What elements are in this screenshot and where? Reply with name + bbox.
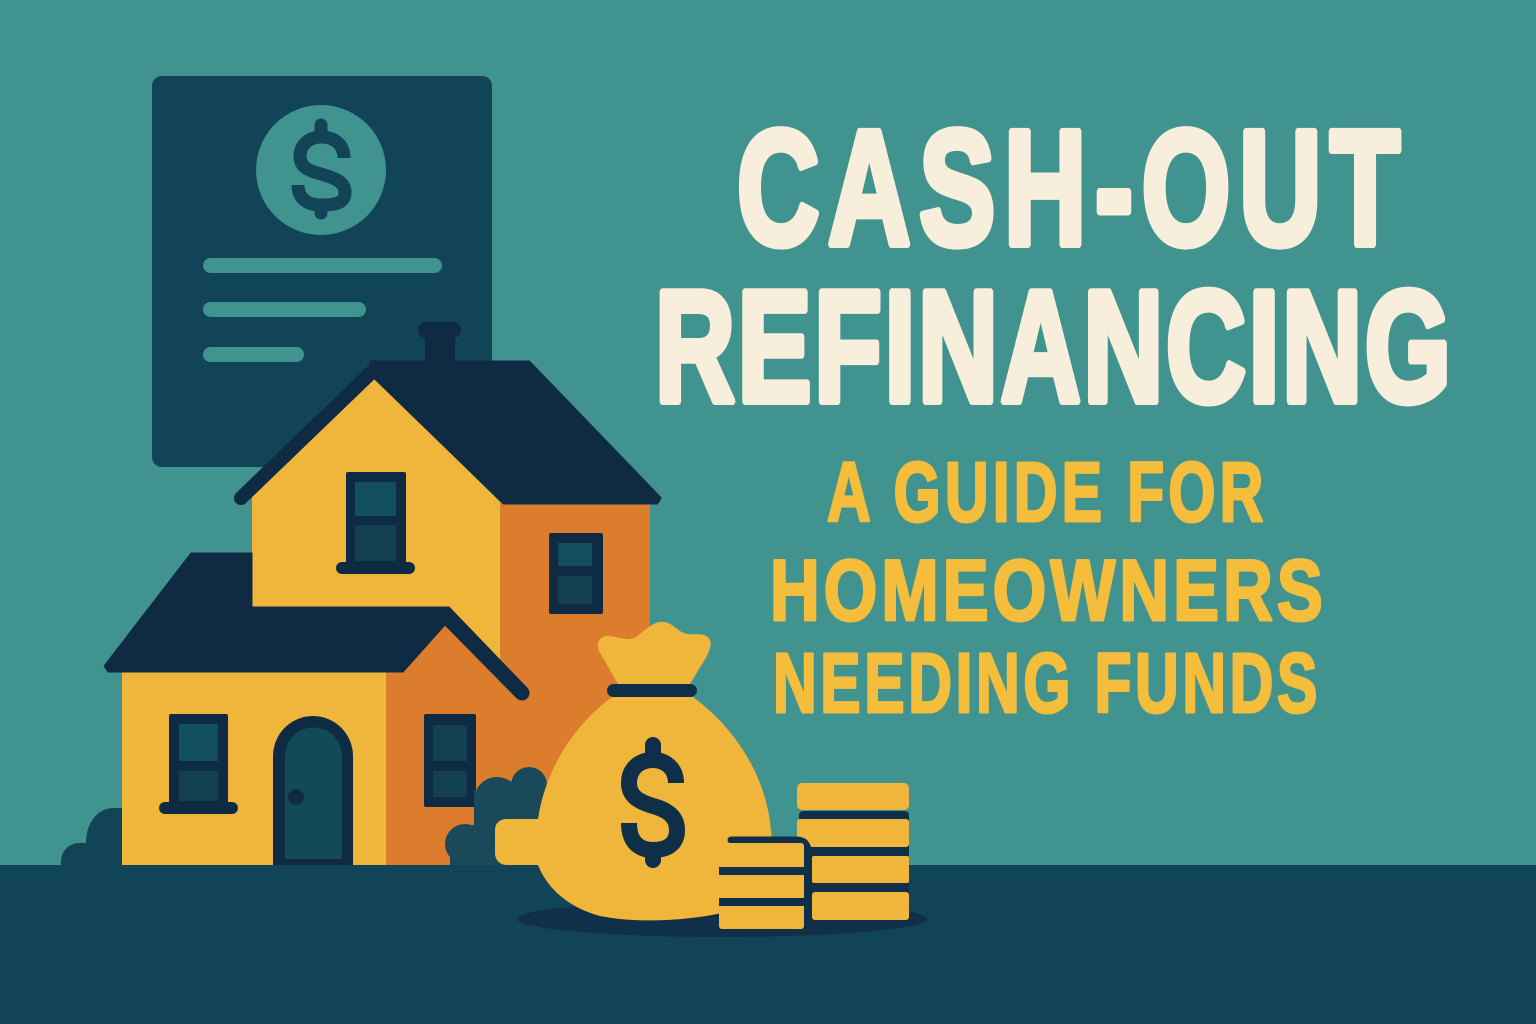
lower roof: [104, 553, 530, 700]
title: REFINANCING: [655, 258, 1451, 435]
upper front window: [336, 472, 415, 574]
subtitle: NEEDING FUNDS: [773, 636, 1317, 730]
chimney: [418, 322, 461, 365]
icon: money bag: [495, 622, 775, 920]
icon: house: [104, 322, 660, 865]
dollar sign: [629, 745, 677, 860]
rear coin stack: [797, 783, 909, 920]
title: CASH-OUT: [737, 97, 1400, 279]
icon: coin stacks: [719, 783, 909, 929]
icon: right bush: [445, 767, 547, 865]
upper roof: [241, 362, 660, 503]
front coin stack: [719, 840, 808, 929]
title: [655, 97, 1451, 435]
ground: [0, 865, 1536, 1024]
subtitle: [770, 445, 1323, 730]
subtitle: HOMEOWNERS: [770, 543, 1323, 639]
upper storey walls: [386, 500, 650, 865]
door: [273, 716, 353, 865]
lower right window: [424, 714, 476, 807]
lower left window: [159, 714, 238, 814]
icon: shadow under money bag: [517, 901, 927, 937]
lower storey front wall: [122, 672, 386, 865]
subtitle: A GUIDE FOR: [827, 445, 1263, 539]
icon: loan document: [152, 76, 492, 467]
upper side window: [549, 533, 603, 614]
icon: left bush: [61, 808, 122, 865]
